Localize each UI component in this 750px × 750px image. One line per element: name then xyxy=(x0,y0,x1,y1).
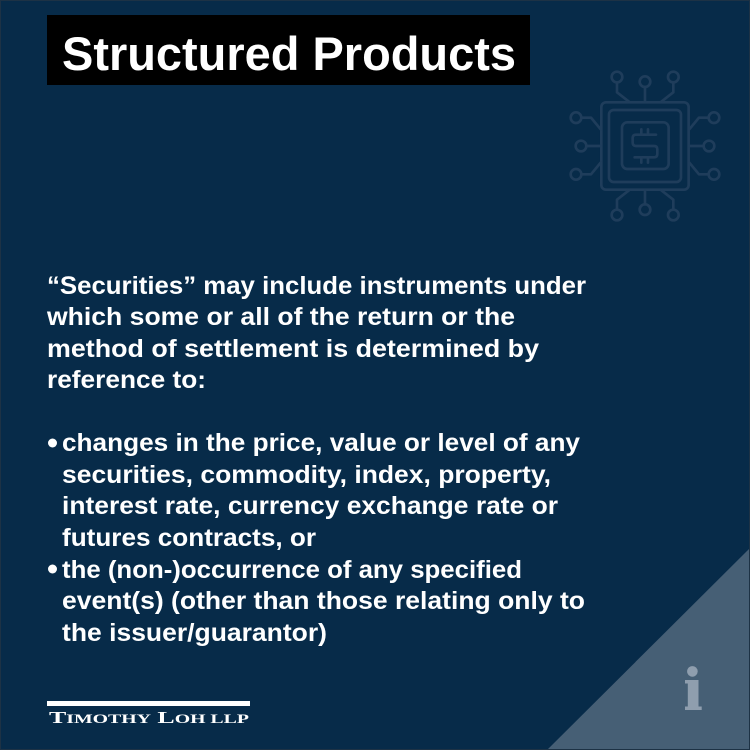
intro text: reference to: xyxy=(47,366,206,394)
intro text: method of settlement is determined by xyxy=(47,335,539,363)
bullet: price changes xyxy=(48,429,580,552)
title: Structured Products xyxy=(62,27,516,80)
logo: Timothy Loh LLP: T IMOTHY L OH LLP xyxy=(49,708,249,728)
icon: chip with dollar sign xyxy=(571,72,719,220)
bullet: price changes: interest rate, currency exchange rate or xyxy=(62,492,558,520)
bullet: specified events: the issuer/guarantor) xyxy=(62,619,327,647)
bullet: specified events xyxy=(48,556,585,647)
bullet: specified events: the (non-)occurrence of any specified xyxy=(62,556,522,584)
logo: Timothy Loh LLP xyxy=(47,701,250,728)
bullet: price changes: futures contracts, or xyxy=(62,524,316,552)
icon: info letter i xyxy=(685,666,702,710)
intro text xyxy=(46,272,586,394)
bullet: price changes: securities, commodity, index, property, xyxy=(62,461,551,489)
bullet: specified events: event(s) (other than those relating only to xyxy=(62,587,585,615)
bullet: price changes: changes in the price, value or level of any xyxy=(62,429,580,457)
triangle corner panel xyxy=(547,548,750,750)
intro text: “Securities” may include instruments under xyxy=(47,272,586,300)
intro text: which some or all of the return or the xyxy=(46,303,515,331)
